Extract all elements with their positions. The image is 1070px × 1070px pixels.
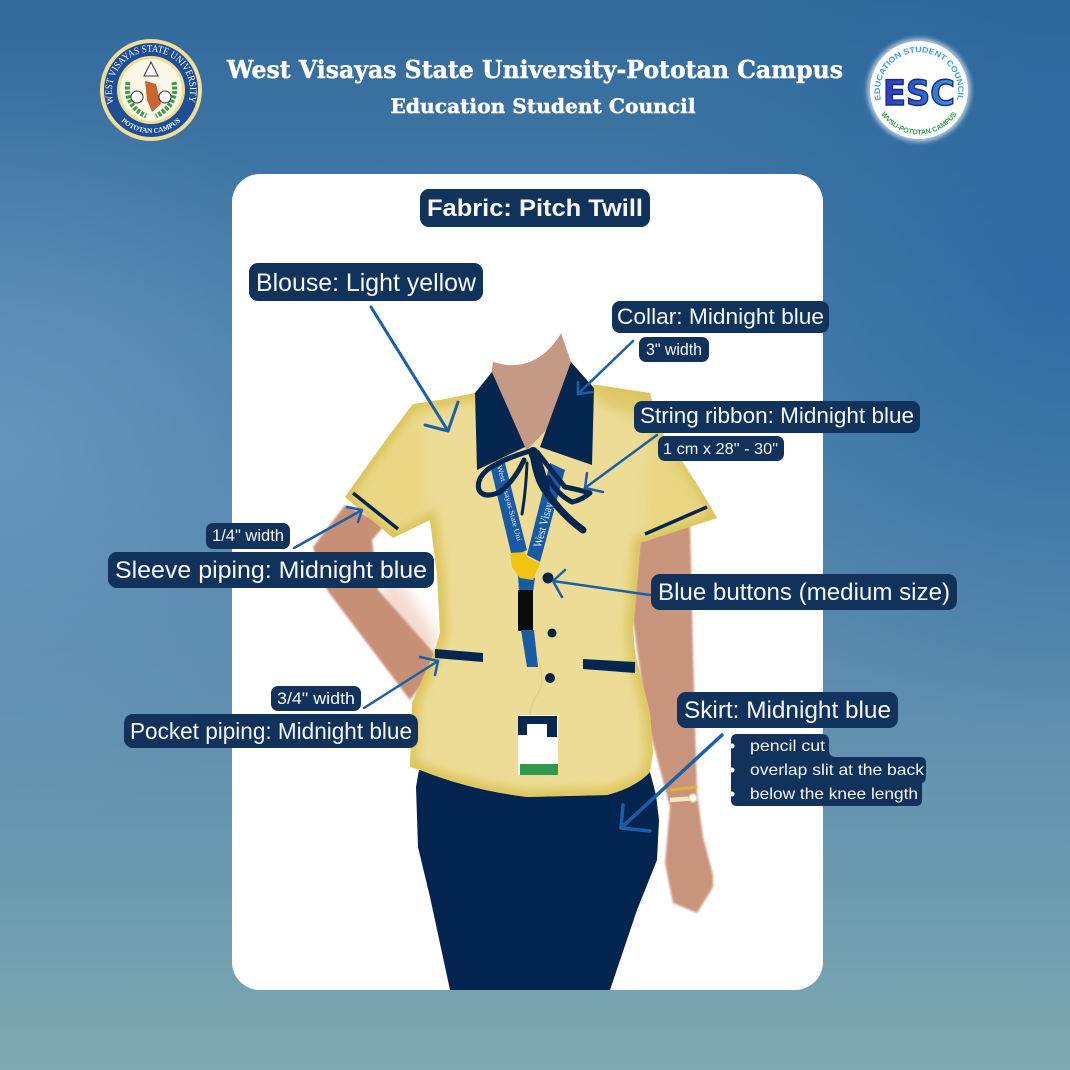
label: skirt: Skirt: Midnight blue [684,697,891,724]
buttons [542,572,556,683]
label: pocket width [271,686,361,711]
label: sleeve width [206,523,290,549]
lanyard: West Visayas State Uni [495,464,524,542]
label: collar width: 3" width [646,340,702,359]
label: blouse [249,263,483,301]
logo: West Visayas State University seal: WEST VISAYAS STATE UNIVERSITY [105,45,197,104]
arrow: collar [578,341,633,394]
label: sleeve width: 1/4" width [212,526,284,545]
arrow: skirt [621,735,722,831]
logo: West Visayas State University seal [100,39,202,141]
sleeve piping [353,493,707,534]
arrow: blouse [371,307,458,431]
collar [475,362,594,470]
title: West Visayas State University-Pototan Campus [226,55,843,84]
panel: white card [232,174,823,990]
label: ribbon size [658,436,784,461]
skirt [416,770,659,990]
arrow: sleeve piping [294,507,362,548]
list: skirt details: pencil cut [750,738,826,755]
list: skirt details: overlap slit at the back [750,762,925,779]
arrow: blue buttons [553,570,650,597]
logo: Education Student Council: WVSU-POTOTAN CAMPUS [882,111,956,134]
neck [488,333,580,450]
ID string [530,655,542,715]
label: sleeve piping [108,552,434,588]
title [226,55,843,118]
label: collar: Collar: Midnight blue [617,304,824,329]
lanyard: West Visay [530,501,556,549]
lanyard [490,463,565,667]
watch and bracelet [670,787,698,802]
label: blouse: Blouse: Light yellow [256,269,477,297]
label: pocket width: 3/4" width [277,689,355,708]
label: sleeve piping: Sleeve piping: Midnight blue [115,557,427,584]
logo: Education Student Council [864,35,974,145]
right arm and hand [633,520,713,913]
arm shadow [380,560,440,680]
label: skirt [677,692,898,728]
list: skirt details: below the knee length [750,786,918,803]
ID card [518,715,558,775]
list: skirt details [730,734,926,806]
label: ribbon size: 1 cm x 28" - 30" [663,441,778,458]
heading: fabric [420,189,650,227]
label: blue buttons: Blue buttons (medium size) [658,579,950,606]
logo: Education Student Council: EDUCATION STUDENT COUNCIL [874,46,964,100]
label: collar width [639,337,709,362]
pocket piping [435,649,635,673]
blouse [345,385,717,797]
arrow: string ribbon [585,435,657,492]
title: Education Student Council [390,94,696,118]
heading: fabric: Fabric: Pitch Twill [427,195,643,222]
logo: West Visayas State University seal: POTOTAN CAMPUS [121,118,180,133]
string ribbon bow [478,451,590,530]
figure: uniformed student [313,333,717,990]
logo: Education Student Council: ESC [883,74,955,114]
arrow: pocket piping [364,657,438,708]
label: pocket piping: Pocket piping: Midnight blue [130,718,412,744]
label: string ribbon: String ribbon: Midnight blue [640,403,914,428]
left arm [313,505,440,700]
